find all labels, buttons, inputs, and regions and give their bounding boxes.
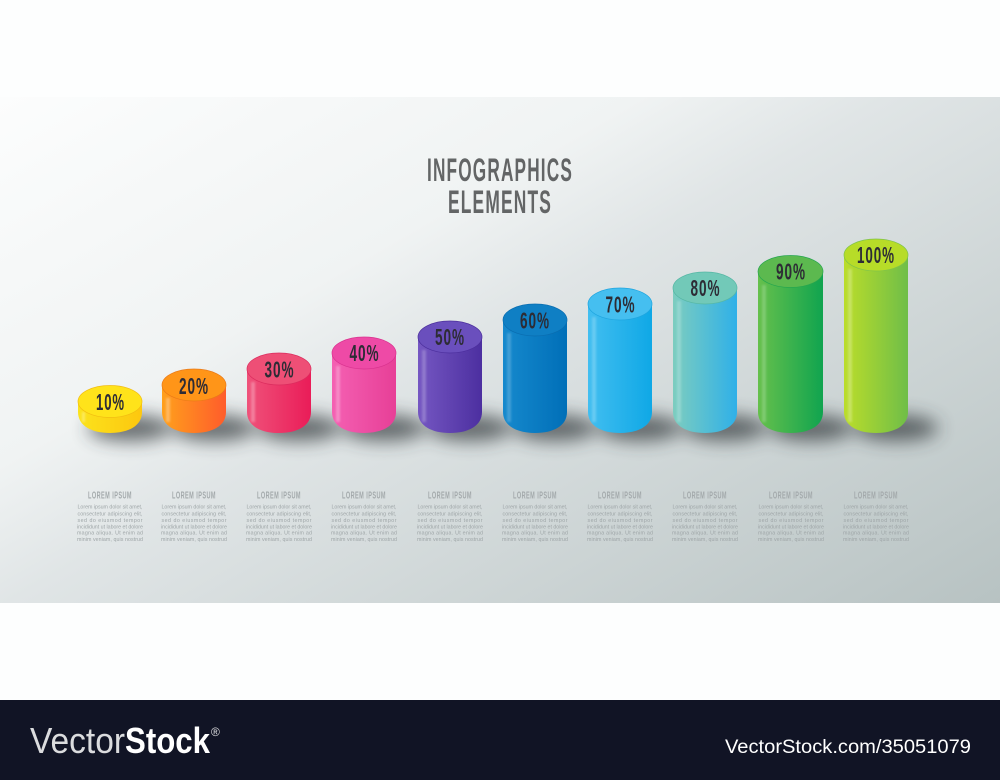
text block 9: sed do eiusmod tempor: [758, 518, 824, 524]
text block 7: [587, 490, 653, 543]
text block 4: LOREM IPSUM: [342, 490, 386, 502]
text block 3: minim veniam, quis nostrud: [246, 537, 312, 543]
footer logo: [30, 720, 220, 761]
text block 5: Lorem ipsum dolor sit amet,: [418, 505, 482, 511]
text block 9: [758, 490, 824, 543]
panel: gradient backdrop: [0, 97, 1000, 603]
text block 6: magna aliqua. Ut enim ad: [502, 531, 568, 537]
cylinder 80%: 80%: [690, 275, 720, 301]
text block 4: sed do eiusmod tempor: [332, 518, 397, 524]
text block 8: magna aliqua. Ut enim ad: [672, 531, 738, 537]
cylinder 100%: [844, 239, 908, 433]
text block 3: incididunt ut labore et dolore: [246, 524, 312, 530]
text block 2: LOREM IPSUM: [172, 490, 216, 502]
text block 3: LOREM IPSUM: [257, 490, 301, 502]
bar chart: cylinders: [78, 239, 908, 433]
text block 4: incididunt ut labore et dolore: [331, 524, 397, 530]
cylinder 10%: 10%: [96, 389, 125, 415]
text block 10: [843, 490, 909, 543]
text block 10: LOREM IPSUM: [854, 490, 898, 502]
text block 1: Lorem ipsum dolor sit amet,: [78, 505, 142, 511]
text block 7: magna aliqua. Ut enim ad: [587, 531, 653, 537]
text block 9: magna aliqua. Ut enim ad: [758, 531, 824, 537]
text block 6: minim veniam, quis nostrud: [502, 537, 568, 543]
cylinder 20%: [162, 369, 226, 433]
text block 1: minim veniam, quis nostrud: [77, 537, 143, 543]
text block 5: minim veniam, quis nostrud: [417, 537, 483, 543]
text block 8: LOREM IPSUM: [683, 490, 727, 502]
text block 4: consectetur adipiscing elit,: [332, 511, 396, 517]
text block 2: minim veniam, quis nostrud: [161, 537, 227, 543]
text block 8: [672, 490, 738, 543]
text block 4: magna aliqua. Ut enim ad: [331, 531, 397, 537]
text block 1: LOREM IPSUM: [88, 490, 132, 502]
text block 10: Lorem ipsum dolor sit amet,: [844, 505, 908, 511]
cylinder 90%: 90%: [776, 258, 806, 284]
text block 3: magna aliqua. Ut enim ad: [246, 531, 312, 537]
title: ELEMENTS: [448, 184, 552, 220]
text block 1: consectetur adipiscing elit,: [78, 511, 142, 517]
text block 6: sed do eiusmod tempor: [502, 518, 568, 524]
text block 6: Lorem ipsum dolor sit amet,: [502, 505, 568, 511]
text block 2: consectetur adipiscing elit,: [162, 511, 226, 517]
text block 5: magna aliqua. Ut enim ad: [417, 531, 483, 537]
text block 7: consectetur adipiscing elit,: [588, 511, 652, 517]
cylinder 40%: 40%: [350, 340, 380, 366]
title: INFOGRAPHICS: [427, 152, 573, 188]
footer logo: Vector: [30, 720, 125, 761]
text block 10: minim veniam, quis nostrud: [843, 537, 909, 543]
cylinder 40%: [332, 337, 396, 433]
title: [427, 152, 573, 220]
text block 8: sed do eiusmod tempor: [672, 518, 738, 524]
text block 1: incididunt ut labore et dolore: [77, 524, 143, 530]
text block 2: Lorem ipsum dolor sit amet,: [162, 505, 226, 511]
text block 7: incididunt ut labore et dolore: [587, 524, 653, 530]
text block 2: sed do eiusmod tempor: [162, 518, 227, 524]
cylinder shadows: [88, 415, 938, 441]
text block 5: [417, 490, 483, 543]
text block 9: Lorem ipsum dolor sit amet,: [758, 505, 824, 511]
text block 7: LOREM IPSUM: [598, 490, 642, 502]
text block 10: incididunt ut labore et dolore: [843, 524, 909, 530]
cylinder 50%: 50%: [435, 324, 465, 350]
text block 3: sed do eiusmod tempor: [246, 518, 312, 524]
text block 7: sed do eiusmod tempor: [588, 518, 653, 524]
cylinder 80%: [673, 272, 737, 433]
cylinder 30%: 30%: [264, 356, 294, 382]
text block 5: incididunt ut labore et dolore: [417, 524, 483, 530]
cylinder 60%: 60%: [520, 308, 550, 334]
cylinder 70%: 70%: [606, 292, 636, 318]
text block 8: incididunt ut labore et dolore: [672, 524, 738, 530]
text block 8: Lorem ipsum dolor sit amet,: [672, 505, 738, 511]
footer image id: VectorStock.com/35051079: [725, 736, 971, 758]
text block 5: consectetur adipiscing elit,: [418, 511, 482, 517]
text block 5: sed do eiusmod tempor: [418, 518, 483, 524]
text block 1: [77, 490, 143, 543]
text block 2: magna aliqua. Ut enim ad: [161, 531, 227, 537]
footer bar: [0, 700, 1000, 780]
text block 9: minim veniam, quis nostrud: [758, 537, 824, 543]
text block 2: [161, 490, 227, 543]
cylinder 70%: [588, 288, 652, 433]
text block 8: consectetur adipiscing elit,: [672, 511, 738, 517]
text block 4: minim veniam, quis nostrud: [331, 537, 397, 543]
text block 9: incididunt ut labore et dolore: [758, 524, 824, 530]
text block 7: Lorem ipsum dolor sit amet,: [588, 505, 652, 511]
cylinder 30%: [247, 353, 311, 433]
cylinder 100%: 100%: [857, 242, 895, 268]
text block 9: consectetur adipiscing elit,: [758, 511, 824, 517]
text block 10: consectetur adipiscing elit,: [844, 511, 908, 517]
text block 9: LOREM IPSUM: [769, 490, 813, 502]
text block 7: minim veniam, quis nostrud: [587, 537, 653, 543]
text block 4: [331, 490, 397, 543]
text block 4: Lorem ipsum dolor sit amet,: [332, 505, 396, 511]
text block 3: Lorem ipsum dolor sit amet,: [246, 505, 312, 511]
text block 1: sed do eiusmod tempor: [78, 518, 143, 524]
text block 6: [502, 490, 568, 543]
text block 3: [246, 490, 312, 543]
text block 6: incididunt ut labore et dolore: [502, 524, 568, 530]
text columns: [77, 490, 909, 543]
text block 3: consectetur adipiscing elit,: [246, 511, 312, 517]
footer logo: ®: [211, 725, 220, 739]
cylinder 50%: [418, 321, 482, 433]
cylinder 10%: [78, 386, 142, 433]
text block 10: sed do eiusmod tempor: [844, 518, 909, 524]
footer logo: Stock: [125, 720, 211, 761]
cylinder 90%: [758, 256, 823, 433]
text block 6: LOREM IPSUM: [513, 490, 557, 502]
text block 5: LOREM IPSUM: [428, 490, 472, 502]
cylinder 20%: 20%: [179, 373, 209, 399]
text block 8: minim veniam, quis nostrud: [672, 537, 738, 543]
text block 10: magna aliqua. Ut enim ad: [843, 531, 909, 537]
text block 2: incididunt ut labore et dolore: [161, 524, 227, 530]
text block 1: magna aliqua. Ut enim ad: [77, 531, 143, 537]
text block 6: consectetur adipiscing elit,: [502, 511, 568, 517]
cylinder 60%: [503, 304, 567, 433]
